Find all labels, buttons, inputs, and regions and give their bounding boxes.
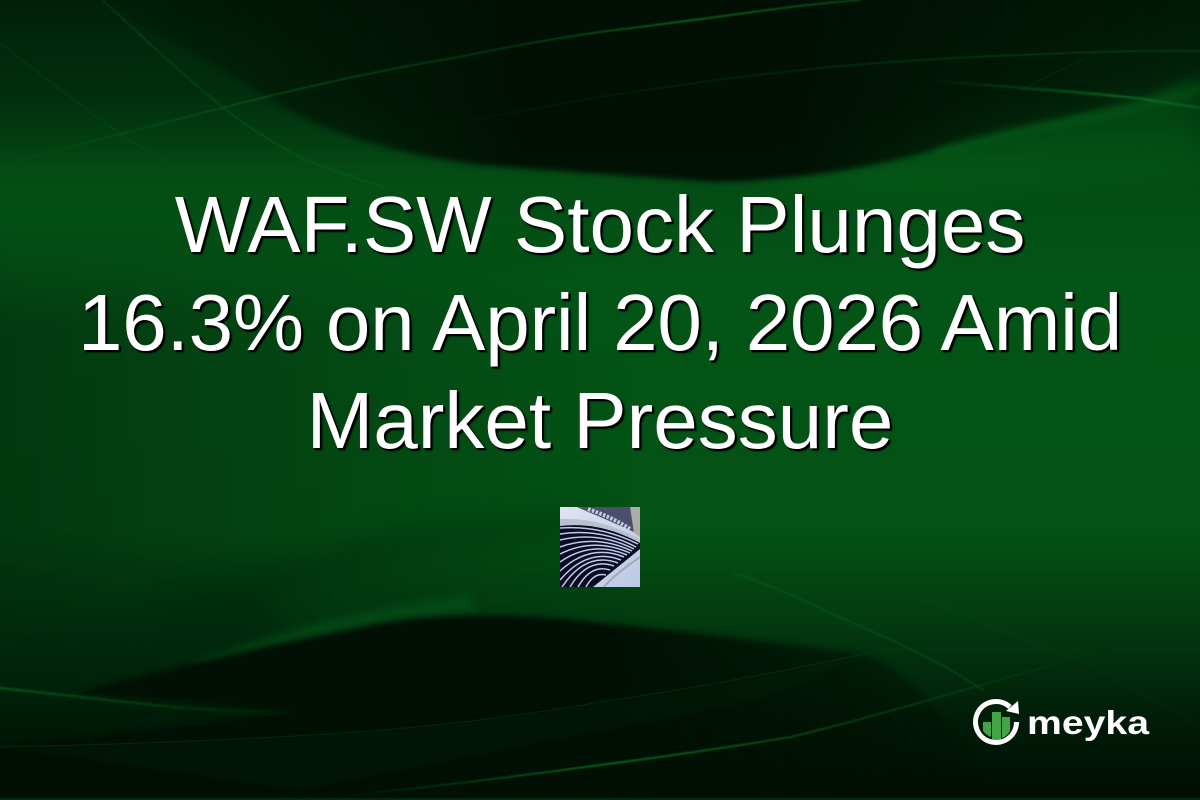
icon: circular arrow with green bars [976,701,1019,742]
wordmark: meyka [1027,704,1150,741]
thumbnail image: metal turbine blades [560,507,640,587]
title: WAF.SW Stock Plunges [175,180,1025,269]
title: 16.3% on April 20, 2026 Amid [78,278,1122,367]
logo: meyka [973,699,1150,745]
title: Market Pressure [307,376,893,465]
title [78,180,1122,465]
